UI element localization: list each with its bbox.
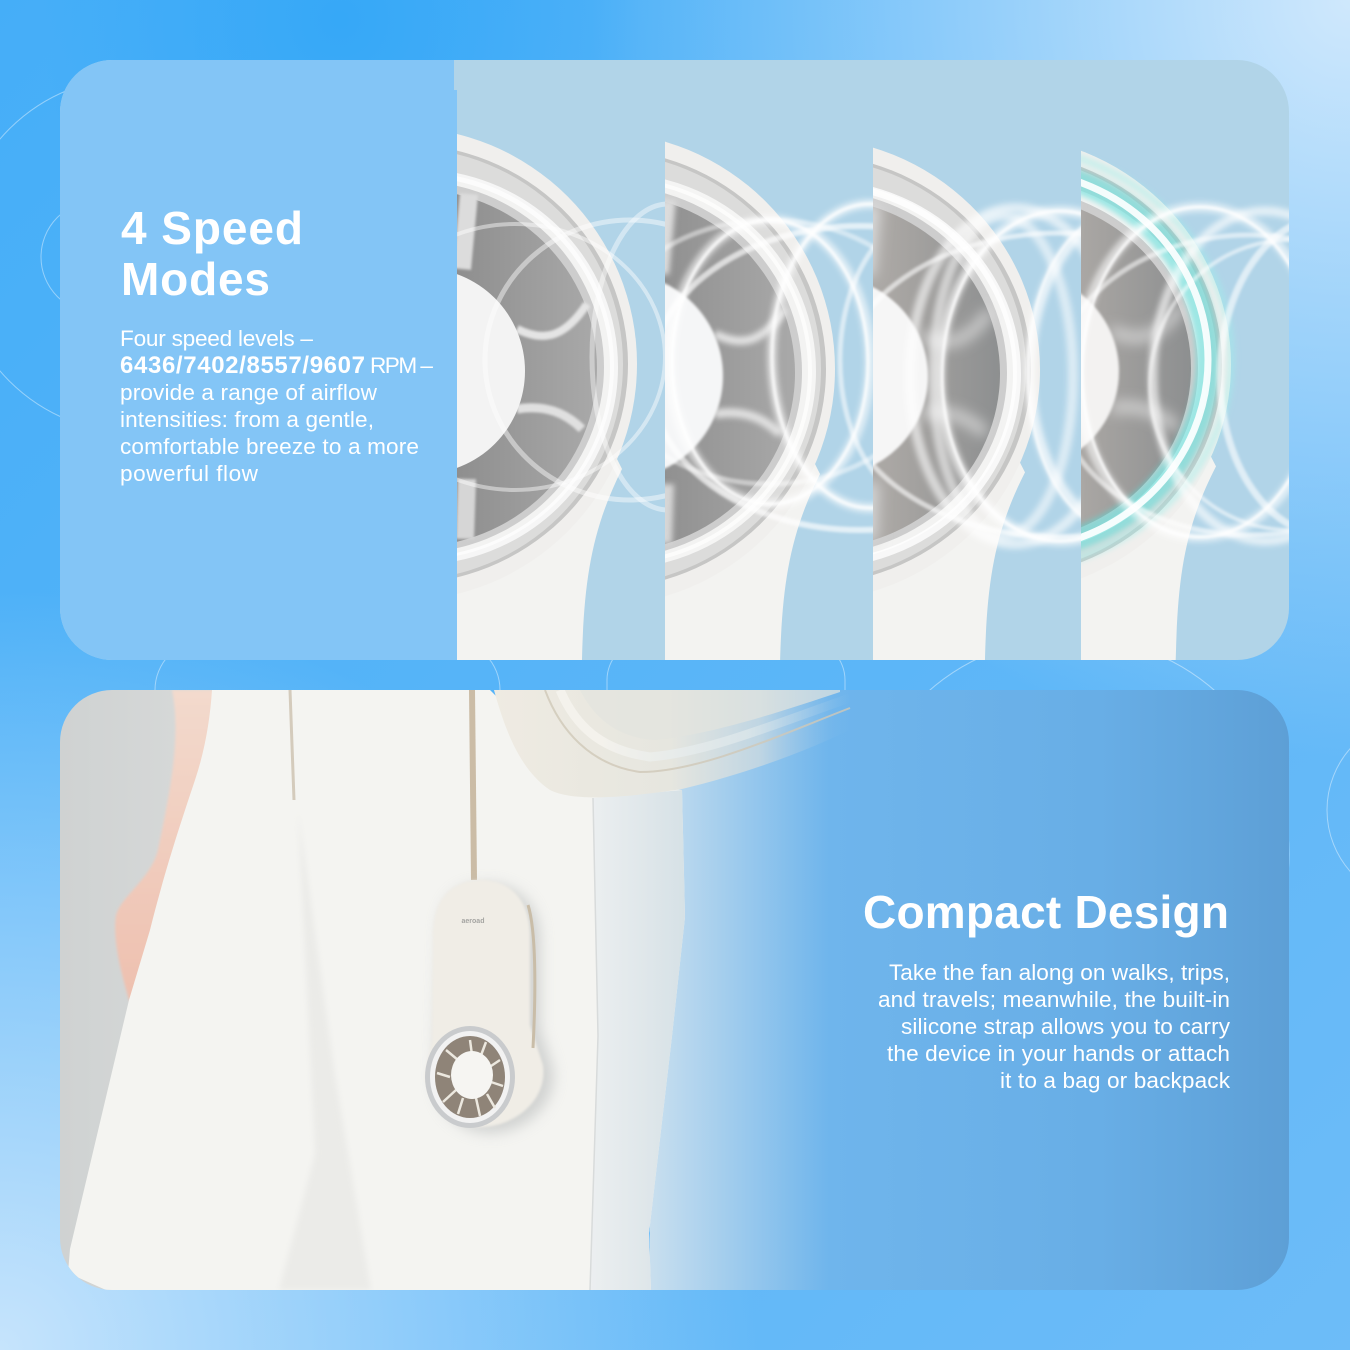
text block: compact description: it to a bag or backpack — [1000, 1068, 1231, 1093]
fan strip: speed 2 — [665, 142, 873, 660]
neck strap — [472, 690, 474, 880]
device: neck fan — [425, 880, 544, 1128]
text block: compact description: Take the fan along on walks, trips, — [889, 960, 1230, 985]
text block: speed description: powerful flow — [120, 461, 259, 486]
panel background — [60, 690, 1289, 1290]
text block: compact description: and travels; meanwhile, the built-in — [878, 987, 1230, 1012]
device shadow — [435, 884, 554, 1133]
text block: speed description: provide a range of airflow — [120, 380, 378, 405]
text block: speed description: 6436/7402/8557/9607 — [120, 352, 365, 379]
shoulder bag — [494, 690, 860, 797]
fan strip: speed 1 — [457, 134, 665, 660]
heading: 4 Speed Modes — [121, 202, 303, 305]
fan strip: speed 4 — [1081, 150, 1289, 660]
text block: compact description: silicone strap allows you to carry — [901, 1014, 1231, 1039]
heading: Compact Design: Compact Design — [863, 886, 1229, 938]
text block: speed description: comfortable breeze to a more — [120, 434, 419, 459]
device: neck fan: aeroad — [462, 918, 484, 925]
heading: 4 Speed Modes: 4 Speed — [121, 202, 303, 254]
text block: speed description — [120, 326, 433, 486]
panel background — [60, 60, 1289, 660]
panel: compact design — [60, 690, 1289, 1290]
text block: compact description — [878, 960, 1231, 1093]
fan strip: speed 3 — [873, 148, 1081, 660]
text block: speed description: intensities: from a gentle, — [120, 407, 374, 432]
text block: speed description: Four speed levels – — [120, 326, 313, 351]
text block: compact description: the device in your hands or attach — [887, 1041, 1230, 1066]
panel: 4 speed modes — [60, 60, 1289, 660]
text block: speed description: RPM – — [370, 353, 433, 378]
photo: person wearing trousers with neck fan — [60, 690, 860, 1290]
heading: 4 Speed Modes: Modes — [121, 253, 270, 305]
